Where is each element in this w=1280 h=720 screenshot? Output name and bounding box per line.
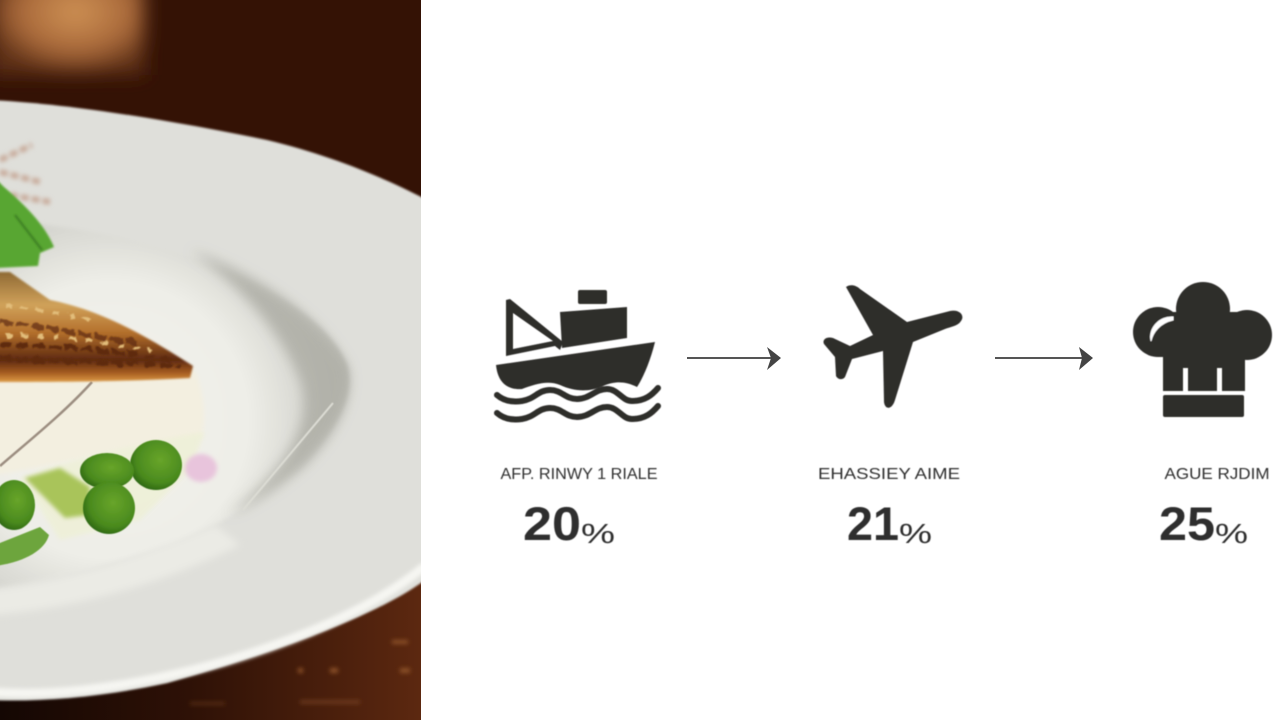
value: chef hat: 25 — [1159, 497, 1215, 550]
arrow: ship to plane — [687, 347, 781, 370]
wood table background — [0, 0, 421, 199]
value: chef hat: % — [1215, 518, 1248, 549]
fish flake line — [0, 382, 92, 466]
label: ship: AFP. RINWY 1 RIALE — [500, 466, 658, 483]
crust mottling — [0, 322, 180, 366]
pink petal — [185, 454, 217, 482]
plate well lower blend — [0, 529, 233, 612]
garnish stems — [0, 145, 50, 202]
value: chef hat — [1159, 497, 1248, 550]
leaf vein — [15, 215, 42, 250]
pea — [130, 440, 182, 490]
hat puff — [1133, 282, 1272, 391]
panel: food photo — [0, 0, 425, 720]
icon: airplane — [823, 285, 962, 408]
crust light flecks — [5, 305, 150, 350]
plate front lip highlight — [0, 566, 425, 693]
label: chef hat: AGUE RJDIM — [1164, 466, 1270, 483]
value: plane: 21 — [847, 497, 899, 550]
blurred warm background highlight — [0, 0, 145, 75]
plate well crease — [250, 402, 334, 502]
value: ship: 20 — [523, 497, 581, 550]
basil leaf — [0, 178, 54, 268]
cabin — [560, 307, 627, 348]
pea — [83, 482, 135, 534]
label: plane: EHASSIEY AIME — [818, 466, 960, 483]
plate well shadow — [190, 250, 349, 515]
hat band — [1163, 395, 1244, 417]
fish crust — [0, 272, 193, 382]
pea slice — [0, 527, 49, 566]
bottom wood table — [0, 582, 421, 720]
funnel — [578, 290, 607, 304]
green herbs — [25, 468, 90, 518]
value: plane: % — [899, 518, 932, 549]
hull — [496, 342, 655, 390]
value: ship — [523, 497, 615, 550]
value: ship: % — [581, 518, 615, 549]
pea — [0, 480, 35, 530]
sail frame — [506, 299, 563, 356]
hat highlight — [1151, 317, 1173, 341]
icon: chef hat — [1133, 282, 1272, 417]
plate well — [0, 222, 349, 590]
icon: ship — [496, 290, 658, 419]
fish body — [0, 374, 202, 470]
wood grain specks — [190, 640, 410, 705]
pea — [80, 453, 134, 489]
creamy green sauce — [20, 432, 205, 540]
value: plane — [847, 497, 932, 550]
waves — [497, 388, 658, 419]
plate outer rim — [0, 100, 425, 700]
arrow: plane to chef hat — [995, 347, 1093, 370]
